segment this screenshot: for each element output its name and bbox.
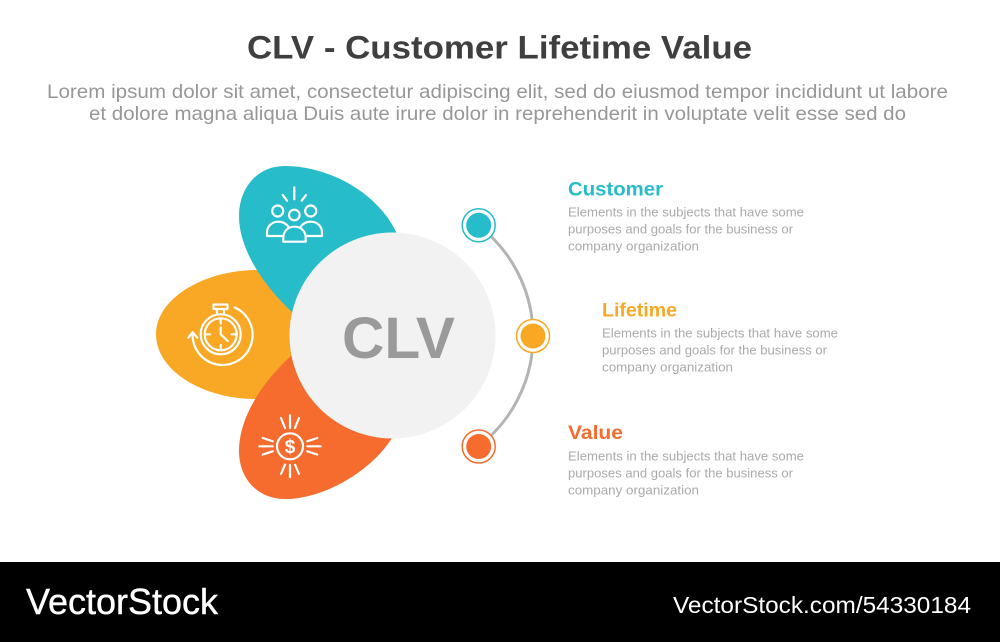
text block: lifetime: [602, 300, 838, 374]
center circle: [290, 232, 496, 438]
center label: CLV: [342, 306, 455, 371]
text block: lifetime: Elements in the subjects that have some: [602, 326, 838, 340]
text block: customer: company organization: [568, 238, 699, 254]
icon: customers group: [267, 187, 322, 242]
footer band: [0, 562, 1000, 642]
petal: lifetime: [156, 270, 300, 399]
text block: customer: purposes and goals for the business or: [568, 222, 794, 236]
text block: value: Value: [568, 423, 623, 444]
subtitle text: Lorem ipsum dolor sit amet, consectetur adipiscing elit, sed do eiusmod tempor incididunt ut labore: [47, 81, 948, 103]
text block: lifetime: purposes and goals for the business or: [602, 342, 828, 358]
title: CLV - Customer Lifetime Value: [247, 30, 752, 66]
petal: customer: [239, 166, 397, 313]
text block: lifetime: Lifetime: [602, 300, 677, 322]
node: customer: [462, 209, 495, 242]
connector arc: [479, 226, 533, 446]
text block: value: Elements in the subjects that have some: [568, 448, 804, 464]
text block: customer: [568, 180, 804, 254]
footer band: VectorStock: [26, 581, 219, 622]
text block: customer: Customer: [568, 180, 664, 200]
node: lifetime: [516, 320, 550, 352]
text block: value: purposes and goals for the business or: [568, 466, 794, 480]
text block: lifetime: company organization: [602, 360, 733, 374]
node: value: [462, 430, 495, 463]
icon: dollar sun: $: [285, 437, 296, 458]
icon: stopwatch: [188, 304, 253, 365]
text block: customer: Elements in the subjects that have some: [568, 204, 804, 220]
icon: dollar sun: [259, 415, 321, 477]
footer band: VectorStock.com/54330184: [673, 592, 971, 618]
text block: value: company organization: [568, 482, 699, 498]
subtitle text: et dolore magna aliqua Duis aute irure dolor in reprehenderit in voluptate velit esse sed do: [89, 103, 906, 125]
text block: value: [568, 423, 804, 498]
subtitle text: [47, 81, 948, 125]
petal: value: [239, 354, 392, 499]
